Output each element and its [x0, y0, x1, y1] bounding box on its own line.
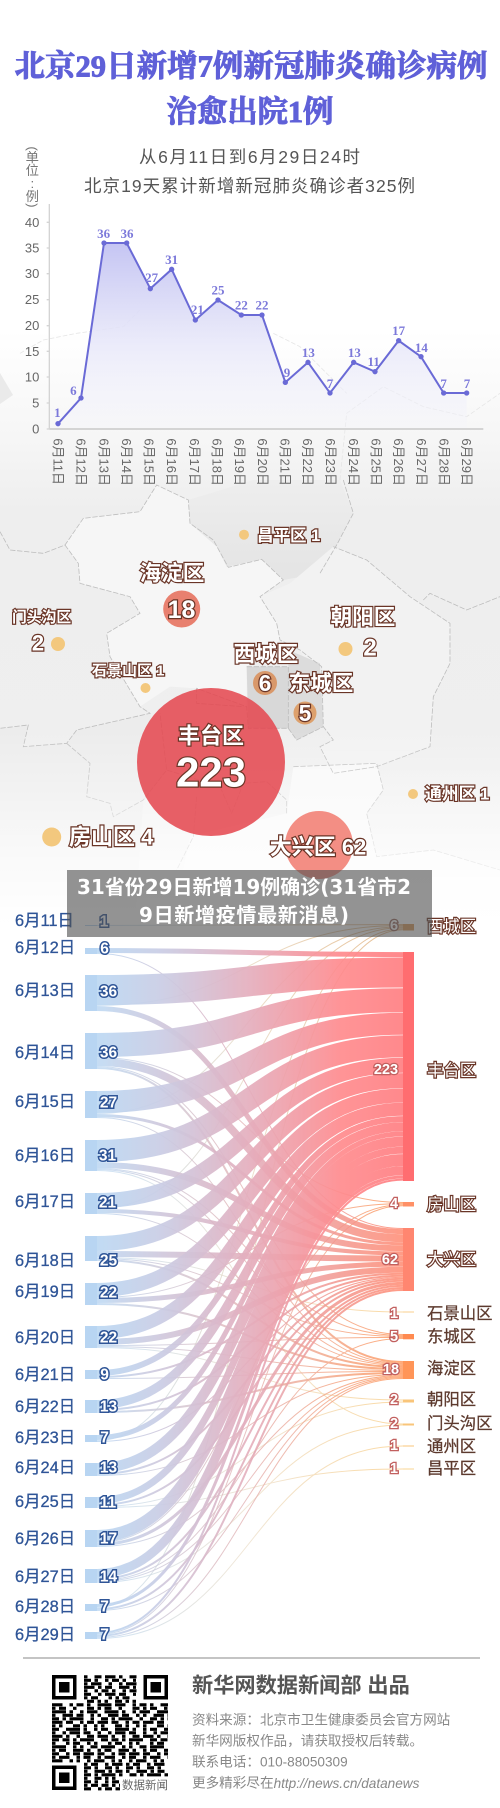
data value labels: 7	[464, 376, 471, 391]
data value labels: 13	[302, 345, 315, 360]
title line 2: 治愈出院1例	[166, 95, 334, 129]
x axis date labels: 6月12日	[73, 438, 88, 486]
x axis date labels: 6月23日	[323, 438, 338, 486]
y axis labels: 30	[25, 266, 39, 281]
data line	[58, 243, 467, 424]
data value labels: 7	[440, 376, 447, 391]
y axis labels: 15	[25, 344, 39, 359]
district name labels: 房山区	[427, 1196, 476, 1214]
bubble: 朝阳区: 朝阳区	[331, 604, 395, 630]
bubble: 东城区: 5	[299, 700, 312, 726]
unit label	[25, 146, 40, 208]
unit label: 位	[26, 163, 39, 178]
bubble: 昌平区: 昌平区 1	[257, 527, 320, 545]
bubble: 大兴区: 大兴区 62	[270, 834, 366, 860]
x axis date labels: 6月20日	[255, 438, 270, 486]
date labels: 6月20日	[15, 1329, 75, 1347]
data value labels: 22	[235, 297, 248, 312]
data value labels: 7	[327, 376, 334, 391]
x axis date labels: 6月22日	[300, 438, 315, 486]
date value labels: 7	[100, 1430, 109, 1446]
district value labels: 5	[390, 1329, 398, 1345]
date labels: 6月24日	[15, 1459, 75, 1477]
district name labels: 海淀区	[427, 1360, 476, 1378]
bubble: 石景山区: 石景山区 1	[92, 662, 165, 680]
district value labels: 2	[390, 1392, 398, 1408]
date labels: 6月29日	[15, 1626, 75, 1644]
date value labels: 7	[100, 1626, 109, 1644]
website line: 更多精彩尽在http://news.cn/datanews	[192, 1774, 420, 1790]
x axis date labels: 6月19日	[232, 438, 247, 486]
date value labels: 17	[100, 1530, 117, 1548]
y axis labels	[25, 215, 39, 436]
date labels: 6月19日	[15, 1283, 75, 1301]
subtitle line 2: 北京19天累计新增新冠肺炎确诊者325例	[84, 176, 415, 196]
data value labels: 27	[145, 270, 159, 285]
district value labels: 2	[390, 1416, 398, 1432]
bubble: 海淀区: 18	[168, 596, 195, 624]
x axis date labels: 6月25日	[368, 438, 383, 486]
axes	[47, 204, 483, 429]
district value labels: 1	[390, 1306, 398, 1322]
data value labels: 31	[165, 252, 178, 267]
date labels: 6月18日	[15, 1252, 75, 1270]
bubble: 门头沟区: 门头沟区	[12, 608, 71, 626]
bubble: 大兴区	[270, 811, 366, 879]
overlay banner: 9日新增疫情最新消息)	[139, 903, 349, 927]
date value labels: 22	[100, 1330, 117, 1346]
x axis date labels: 6月21日	[277, 438, 292, 486]
date value labels: 25	[100, 1252, 117, 1270]
date labels: 6月25日	[15, 1493, 75, 1511]
overlay banner	[67, 870, 432, 937]
district name labels: 门头沟区	[427, 1415, 493, 1433]
x axis date labels: 6月15日	[141, 438, 156, 486]
date value labels: 14	[100, 1568, 117, 1586]
sankey flows	[97, 924, 403, 1638]
data value labels: 17	[392, 323, 406, 338]
title	[14, 48, 488, 129]
map district bubbles	[12, 527, 489, 879]
date value labels: 13	[100, 1460, 117, 1476]
data value labels: 36	[97, 226, 111, 241]
district value labels: 1	[390, 1438, 398, 1454]
date labels: 6月21日	[15, 1366, 75, 1384]
date value labels: 27	[100, 1094, 117, 1112]
data value labels: 25	[212, 282, 225, 297]
district name labels: 昌平区	[427, 1460, 476, 1478]
y axis labels: 0	[32, 421, 39, 436]
bubble: 海淀区	[140, 560, 204, 628]
date value labels: 22	[100, 1284, 117, 1302]
date value labels	[99, 914, 117, 1644]
bubble: 丰台区	[137, 688, 285, 836]
district name labels	[427, 918, 493, 1478]
bubble: 门头沟区	[12, 608, 71, 656]
district value labels: 6	[390, 918, 398, 934]
bubble: 西城区	[234, 642, 298, 696]
date value labels: 13	[100, 1398, 117, 1416]
subtitle line 1: 从6月11日到6月29日24时	[139, 147, 360, 167]
unit label: 单	[26, 150, 39, 165]
data value labels: 11	[368, 354, 380, 369]
district value labels: 223	[374, 1062, 398, 1078]
date value labels: 6	[100, 940, 109, 958]
right district nodes	[403, 924, 414, 1470]
unit label: )	[25, 203, 40, 208]
date labels: 6月27日	[15, 1568, 75, 1586]
date value labels: 36	[100, 1044, 117, 1062]
district value labels: 18	[383, 1362, 399, 1378]
bubble: 西城区: 6	[259, 670, 271, 696]
left date nodes	[85, 925, 97, 1639]
filled area under line	[58, 243, 467, 429]
x axis date labels: 6月27日	[414, 438, 429, 486]
date labels: 6月23日	[15, 1429, 75, 1447]
data value labels: 13	[348, 345, 361, 360]
x axis date labels: 6月16日	[164, 438, 179, 486]
date value labels: 7	[100, 1598, 109, 1616]
district name labels: 丰台区	[427, 1062, 476, 1080]
date value labels: 21	[99, 1194, 116, 1212]
x axis date labels: 6月18日	[209, 438, 224, 486]
bubble: 丰台区: 223	[176, 748, 246, 796]
x axis date labels: 6月29日	[459, 438, 474, 486]
y axis labels: 40	[25, 215, 39, 230]
date labels: 6月14日	[15, 1044, 75, 1062]
sankey diagram: date to district	[15, 912, 493, 1644]
chart subtitle	[84, 147, 415, 196]
bubble: 房山区: 房山区 4	[69, 824, 154, 850]
district name labels: 朝阳区	[427, 1391, 476, 1409]
QR code	[52, 1677, 169, 1793]
data value labels: 22	[256, 297, 268, 312]
district value labels	[374, 918, 399, 1477]
y axis labels: 35	[25, 240, 39, 255]
data value labels: 21	[191, 302, 204, 317]
date value labels: 31	[99, 1148, 116, 1164]
bubble: 石景山区	[92, 662, 165, 693]
district value labels: 4	[390, 1196, 398, 1212]
bubble: 丰台区: 丰台区	[178, 724, 244, 748]
district name labels: 石景山区	[427, 1305, 493, 1323]
data value labels	[54, 226, 471, 420]
bubble: 门头沟区: 2	[32, 630, 44, 656]
data value labels: 14	[415, 340, 428, 355]
y axis labels: 10	[25, 369, 39, 384]
data value labels: 6	[70, 383, 77, 398]
bubble: 西城区: 西城区	[234, 642, 298, 666]
copyright line: 新华网版权作品，请获取授权后转载。	[192, 1732, 423, 1748]
x axis date labels: 6月13日	[96, 438, 111, 486]
date labels: 6月11日	[15, 912, 74, 930]
bubble: 海淀区: 海淀区	[140, 560, 204, 586]
y axis labels: 25	[25, 292, 39, 307]
publisher heading: 新华网数据新闻部 出品	[192, 1674, 410, 1698]
date labels: 6月26日	[15, 1530, 75, 1548]
x axis date labels: 6月14日	[119, 438, 134, 486]
title line 1: 北京29日新增7例新冠肺炎确诊病例	[14, 48, 488, 84]
district name labels: 通州区	[427, 1438, 476, 1456]
QR code: 数据新闻	[122, 1778, 168, 1792]
district name labels: 西城区	[427, 918, 476, 936]
district value labels: 1	[390, 1461, 398, 1477]
unit label: 例	[26, 189, 39, 204]
date labels: 6月15日	[15, 1093, 75, 1111]
source line: 资料来源：北京市卫生健康委员会官方网站	[192, 1712, 451, 1728]
y axis labels: 5	[32, 395, 39, 410]
map of Beijing districts	[0, 310, 500, 955]
district name labels: 大兴区	[427, 1251, 476, 1269]
data points	[55, 240, 469, 426]
date value labels: 1	[100, 914, 109, 930]
footer divider	[23, 1658, 480, 1659]
bubble: 东城区	[289, 670, 353, 726]
district value labels: 62	[382, 1252, 398, 1268]
date labels: 6月22日	[15, 1398, 75, 1416]
x axis date labels: 6月26日	[391, 438, 406, 486]
date labels: 6月12日	[15, 939, 75, 957]
district name labels: 东城区	[427, 1328, 476, 1346]
x axis date labels	[50, 438, 474, 486]
x axis date labels: 6月24日	[346, 438, 361, 486]
contact line: 联系电话：010-88050309	[192, 1754, 348, 1770]
overlay banner: 31省份29日新增19例确诊(31省市2	[77, 875, 411, 899]
unit label: :	[30, 176, 34, 191]
data value labels: 1	[54, 405, 61, 420]
date labels: 6月17日	[15, 1193, 75, 1211]
x axis date labels: 6月17日	[187, 438, 202, 486]
date value labels: 36	[100, 984, 117, 1000]
date labels: 6月16日	[15, 1147, 75, 1165]
date labels: 6月13日	[15, 982, 75, 1000]
date labels: 6月28日	[15, 1598, 75, 1616]
bubble: 朝阳区: 2	[363, 634, 377, 662]
date labels	[15, 912, 75, 1644]
x axis date labels: 6月11日	[50, 438, 65, 485]
data value labels: 36	[121, 226, 134, 241]
date value labels: 9	[100, 1366, 109, 1384]
date value labels: 11	[100, 1494, 117, 1512]
bubble: 东城区: 东城区	[289, 670, 353, 696]
data value labels: 9	[284, 365, 291, 380]
x axis date labels: 6月28日	[436, 438, 451, 486]
line chart: daily new cases	[25, 146, 483, 486]
unit label: (	[25, 146, 40, 151]
bubble: 朝阳区	[331, 604, 395, 662]
bubble: 通州区: 通州区 1	[425, 784, 489, 804]
footer text block	[192, 1674, 451, 1790]
y axis labels: 20	[25, 318, 39, 333]
